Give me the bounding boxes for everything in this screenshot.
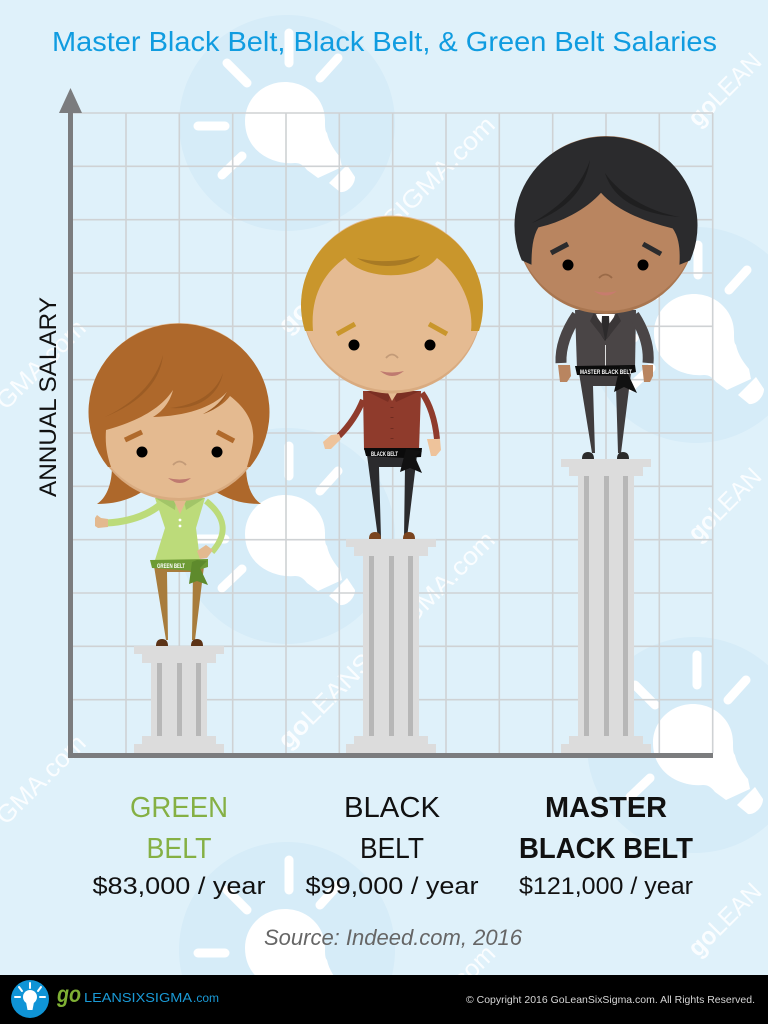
- green belt with knot: [150, 559, 208, 585]
- label: green belt: GREEN: [130, 792, 228, 824]
- label: green belt: $83,000 / year: [92, 873, 266, 900]
- label: black belt: $99,000 / year: [306, 873, 478, 900]
- hair: [89, 324, 270, 467]
- logo wordmark: go: [56, 981, 81, 1007]
- grey suit and arms: [561, 310, 648, 369]
- chart grid: [72, 113, 713, 753]
- hands: [95, 515, 213, 559]
- blond hair: [301, 217, 483, 331]
- chart axes with arrow: [59, 88, 713, 758]
- title: Master Black Belt, Black Belt, & Green Belt Salaries: [52, 26, 717, 57]
- legs and shoes: [579, 373, 631, 459]
- facial features: [337, 324, 447, 376]
- facial features: [551, 244, 661, 296]
- character: black belt man: [301, 216, 483, 539]
- column: master black belt: [561, 459, 651, 753]
- brand text watermarks: goLEANSIXSIGMA.com: [272, 526, 501, 754]
- copyright: © Copyright 2016 GoLeanSixSigma.com. All Rights Reserved.: [466, 994, 755, 1006]
- face: [90, 323, 268, 501]
- logo wordmark: LEANSIXSIGMA: [84, 990, 192, 1005]
- black belt with knot: [364, 448, 422, 473]
- label: master black belt: $121,000 / year: [519, 873, 693, 900]
- green shirt and arms: [107, 498, 223, 560]
- label: green belt: BELT: [146, 833, 212, 865]
- brand text watermarks: .com: [442, 940, 501, 998]
- logo wordmark: [56, 981, 219, 1007]
- character: green belt woman: [89, 323, 270, 646]
- source note: Source: Indeed.com, 2016: [264, 925, 523, 950]
- label: master black belt: BLACK BELT: [519, 833, 693, 865]
- master black belt with knot: [575, 365, 637, 393]
- hair streak: [357, 255, 420, 266]
- character: master black belt man: [515, 136, 697, 459]
- axis label: annual salary: ANNUAL SALARY: [35, 297, 62, 497]
- label: green belt: [92, 792, 266, 900]
- face: [516, 136, 696, 314]
- logo wordmark: .com: [193, 993, 219, 1005]
- black hair: [515, 137, 697, 264]
- hair flips: [97, 466, 261, 504]
- red shirt and arms: [339, 391, 437, 450]
- brand text watermarks: goLEAN: [682, 47, 767, 132]
- facial features: [125, 432, 234, 483]
- brand text watermarks: goLEAN: [682, 462, 767, 547]
- hair streaks: [532, 160, 680, 223]
- label: master black belt: [519, 792, 693, 900]
- black belt with knot: BLACK BELT: [371, 451, 398, 458]
- label: master black belt: MASTER: [545, 792, 667, 824]
- legs and shoes: [154, 566, 204, 646]
- brand text watermarks: goLEAN: [682, 877, 767, 962]
- label: black belt: [306, 792, 478, 900]
- master black belt with knot: MASTER BLACK BELT: [580, 370, 632, 376]
- footer bar: [0, 975, 768, 1024]
- hands: [558, 365, 653, 382]
- column: black belt: [346, 539, 436, 753]
- background lightbulb watermarks: [179, 15, 768, 1024]
- label: black belt: BELT: [360, 833, 424, 865]
- brand text watermarks: goLEANSIXSIGMA.com: [272, 111, 501, 339]
- face: [302, 216, 482, 394]
- hands: [323, 434, 441, 456]
- label: black belt: BLACK: [344, 792, 441, 824]
- legs and shoes: [367, 455, 417, 539]
- hair streaks: [105, 355, 227, 417]
- green belt with knot: GREEN BELT: [157, 563, 185, 570]
- icon: logo lightbulb: [11, 980, 49, 1018]
- column: green belt: [134, 646, 224, 753]
